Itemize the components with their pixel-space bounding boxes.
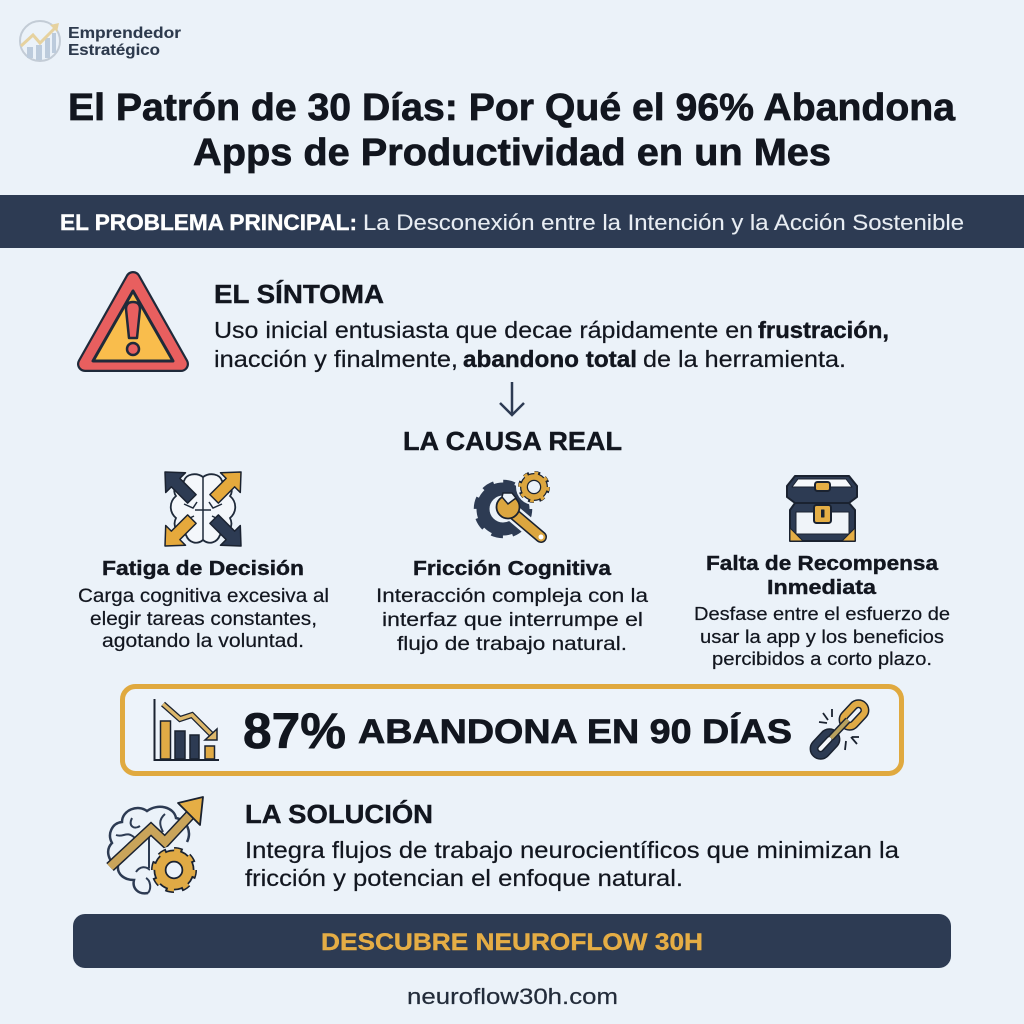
heading: fricción cognitiva: Fricción Cognitiva bbox=[413, 558, 612, 580]
button: call to action: DESCUBRE NEUROFLOW 30H bbox=[321, 929, 703, 956]
banner: main problem: La Desconexión entre la Intención y la Acción Sostenible bbox=[363, 210, 964, 235]
panel: decision fatigue bbox=[78, 462, 329, 652]
description: recompensa: usar la app y los beneficios bbox=[700, 626, 944, 647]
icon: warning triangle bbox=[85, 279, 181, 364]
description: fatiga bbox=[78, 586, 329, 652]
heading: la causa real: LA CAUSA REAL bbox=[403, 426, 622, 456]
description: fatiga: agotando la voluntad. bbox=[102, 631, 304, 652]
symptom description: Uso inicial entusiasta que decae rápidamente en bbox=[214, 317, 753, 343]
heading: fatiga de decisión: Fatiga de Decisión bbox=[102, 558, 304, 580]
website url: neuroflow30h.com bbox=[407, 984, 618, 1009]
description: fatiga: elegir tareas constantes, bbox=[90, 609, 317, 630]
description: recompensa bbox=[694, 603, 950, 669]
title: Apps de Productividad en un Mes bbox=[193, 132, 831, 174]
symptom description: frustración, bbox=[758, 317, 889, 343]
description: fricción: Interacción compleja con la bbox=[376, 586, 648, 607]
button: call to action bbox=[73, 914, 951, 968]
description: fatiga: Carga cognitiva excesiva al bbox=[78, 586, 329, 607]
icon: gears and wrench bbox=[478, 469, 552, 540]
icon: brain with arrows bbox=[155, 462, 251, 556]
description: fricción bbox=[376, 586, 648, 655]
icon: brain with arrow and gear bbox=[108, 797, 203, 894]
arrow: down bbox=[500, 382, 524, 415]
callout: 87% stat bbox=[122, 686, 902, 774]
description: recompensa: percibidos a corto plazo. bbox=[712, 648, 932, 669]
icon: growth chart in circle bbox=[20, 21, 60, 61]
symptom description bbox=[214, 317, 889, 372]
description: fricción: interfaz que interrumpe el bbox=[382, 610, 643, 631]
icon: falling bar chart bbox=[154, 699, 219, 760]
heading: falta de recompensa inmediata: Falta de Recompensa bbox=[706, 553, 939, 575]
logo text: Emprendedor bbox=[68, 25, 181, 42]
symptom description: de la herramienta. bbox=[643, 346, 846, 372]
icon: treasure chest bbox=[787, 476, 857, 541]
solution description: fricción y potencian el enfoque natural. bbox=[245, 865, 683, 891]
logo bbox=[20, 21, 181, 61]
panel: symptom bbox=[85, 279, 889, 372]
title: El Patrón de 30 Días: Por Qué el 96% Abandona bbox=[68, 87, 956, 129]
stat label: ABANDONA EN 90 DÍAS bbox=[358, 713, 792, 751]
banner: main problem bbox=[0, 195, 1024, 248]
symptom description: inacción y finalmente, bbox=[214, 346, 458, 372]
heading: la solución: LA SOLUCIÓN bbox=[245, 799, 433, 829]
description: recompensa: Desfase entre el esfuerzo de bbox=[694, 603, 950, 624]
symptom description: abandono total bbox=[463, 346, 637, 372]
title bbox=[68, 87, 956, 174]
solution description bbox=[245, 837, 899, 891]
banner: main problem: EL PROBLEMA PRINCIPAL: bbox=[60, 210, 357, 235]
panel: lack of immediate reward bbox=[694, 476, 950, 669]
heading: falta de recompensa inmediata: Inmediata bbox=[767, 577, 877, 599]
description: fricción: flujo de trabajo natural. bbox=[397, 634, 627, 655]
logo text: Estratégico bbox=[68, 42, 160, 59]
panel: cognitive friction bbox=[376, 469, 648, 655]
solution description: Integra flujos de trabajo neurocientíficos que minimizan la bbox=[245, 837, 899, 863]
heading: el síntoma: EL SÍNTOMA bbox=[214, 279, 384, 309]
stat: 87%: 87% bbox=[243, 703, 346, 759]
heading: falta de recompensa inmediata bbox=[706, 553, 939, 599]
icon: broken chain bbox=[811, 701, 868, 758]
panel: solution bbox=[108, 797, 899, 894]
logo text bbox=[68, 25, 181, 59]
